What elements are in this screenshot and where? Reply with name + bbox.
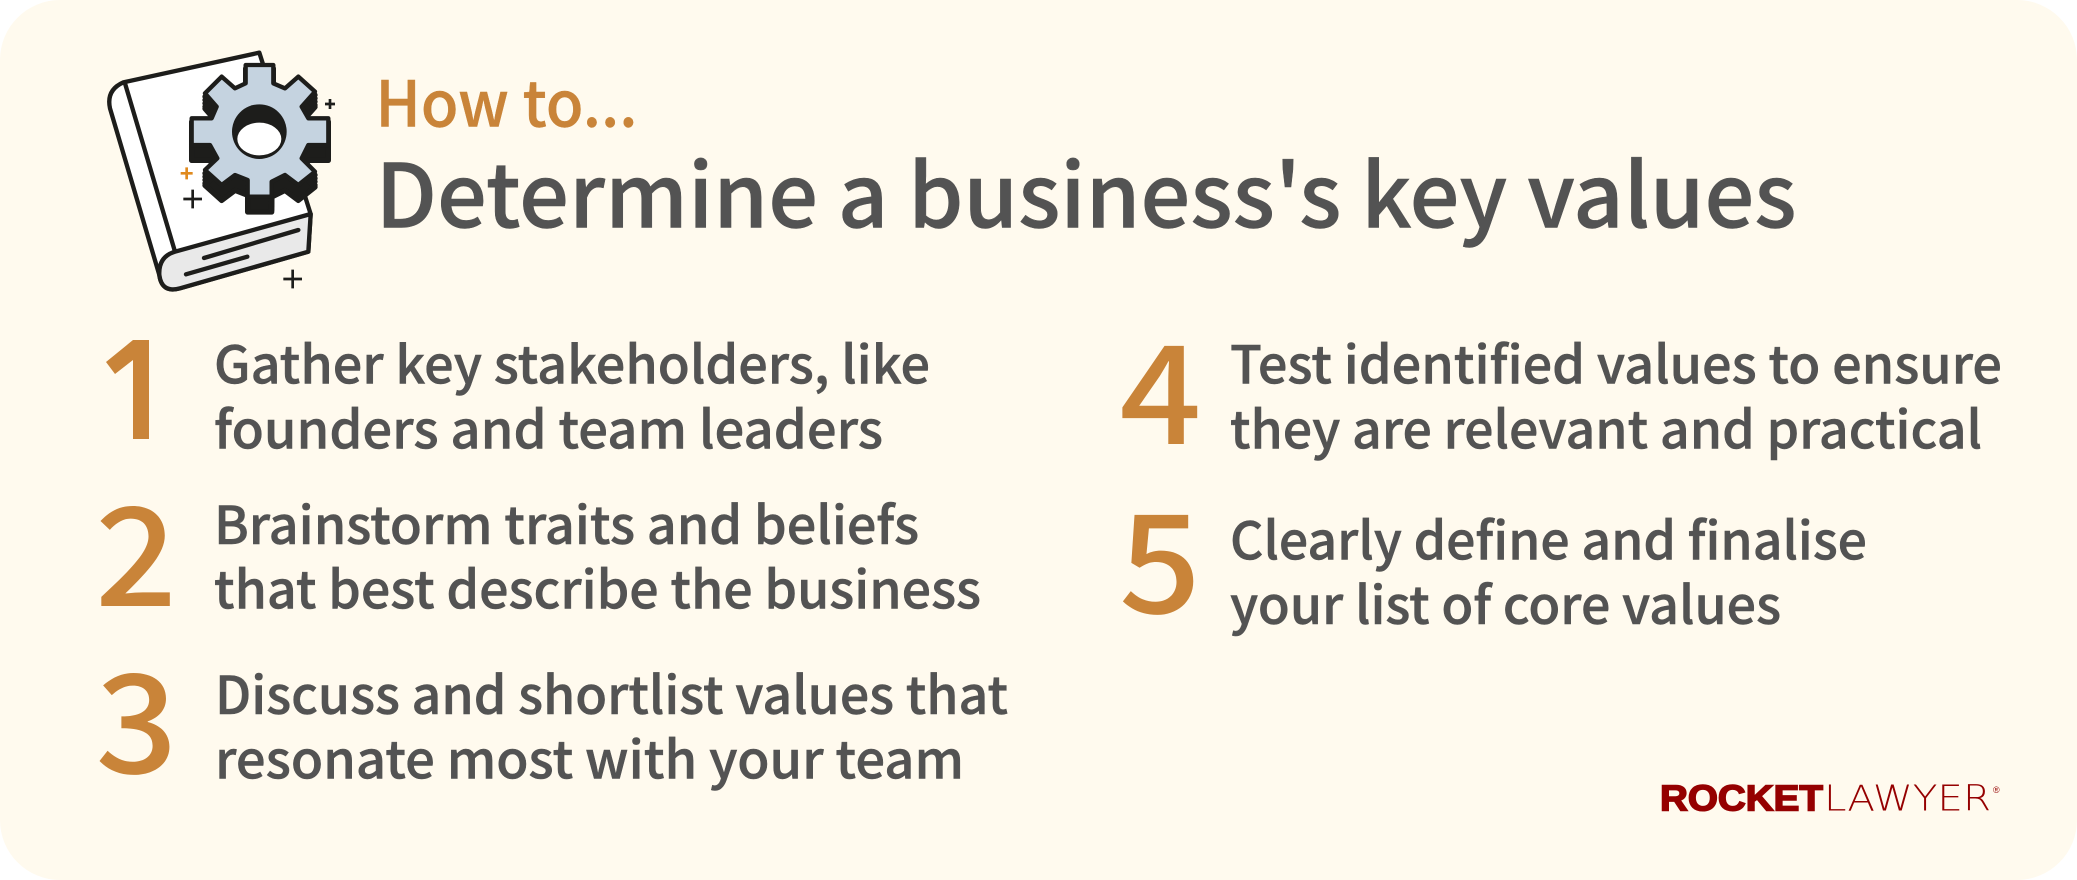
step 4 text: [1230, 323, 2002, 463]
step 1: [106, 340, 928, 450]
step 1 text: founders and team leaders: [214, 388, 883, 464]
logo: Rocket Lawyer: ®: [1993, 785, 2000, 795]
number 2: 2: [95, 448, 177, 646]
number 3: 3: [96, 615, 178, 813]
step 3 text: [215, 654, 1008, 794]
icon: book with gear: [109, 53, 335, 289]
orange sparkle: [181, 167, 193, 179]
number 4: 4: [1120, 286, 1202, 484]
step 4 text: they are relevant and practical: [1230, 388, 1982, 463]
number 1: 1: [98, 281, 176, 479]
step 3: [96, 615, 1008, 813]
step 2 text: Brainstorm traits and beliefs: [214, 484, 919, 559]
step 3 text: resonate most with your team: [215, 719, 964, 794]
step 2: [95, 448, 981, 646]
step 1 text: [214, 324, 930, 464]
logo: Rocket Lawyer: ROCKET: [1660, 778, 1823, 819]
book pages: [159, 214, 311, 289]
logo: Rocket Lawyer: LAWYER: [1824, 779, 1991, 820]
step 2 text: that best describe the business: [214, 548, 981, 623]
heading: How to: How to...: [376, 55, 638, 146]
book cover: [109, 53, 311, 289]
step 4: [1120, 286, 2002, 484]
book spine line: [125, 83, 175, 252]
step 5 text: your list of core values: [1230, 564, 1781, 639]
book page lines: [186, 230, 298, 274]
sparkle pluses: [183, 99, 335, 288]
number 5: 5: [1119, 455, 1201, 653]
gear hole highlight: [237, 123, 281, 155]
step 1 text: Gather key stakeholders, like: [214, 324, 930, 398]
step 5 text: [1230, 499, 1867, 639]
gear hole: [232, 104, 287, 159]
number 1: [106, 340, 149, 439]
step 4 text: Test identified values to ensure: [1230, 323, 2002, 398]
step 2 text: [214, 484, 981, 623]
step 3 text: Discuss and shortlist values that: [215, 654, 1008, 729]
step 5 text: Clearly define and finalise: [1230, 499, 1867, 574]
step 5: [1119, 455, 1867, 653]
logo: Rocket Lawyer: [1660, 778, 2000, 820]
heading: main title: Determine a business's key values: [376, 127, 1796, 254]
gear shadow: [192, 68, 328, 212]
gear: [192, 65, 328, 197]
